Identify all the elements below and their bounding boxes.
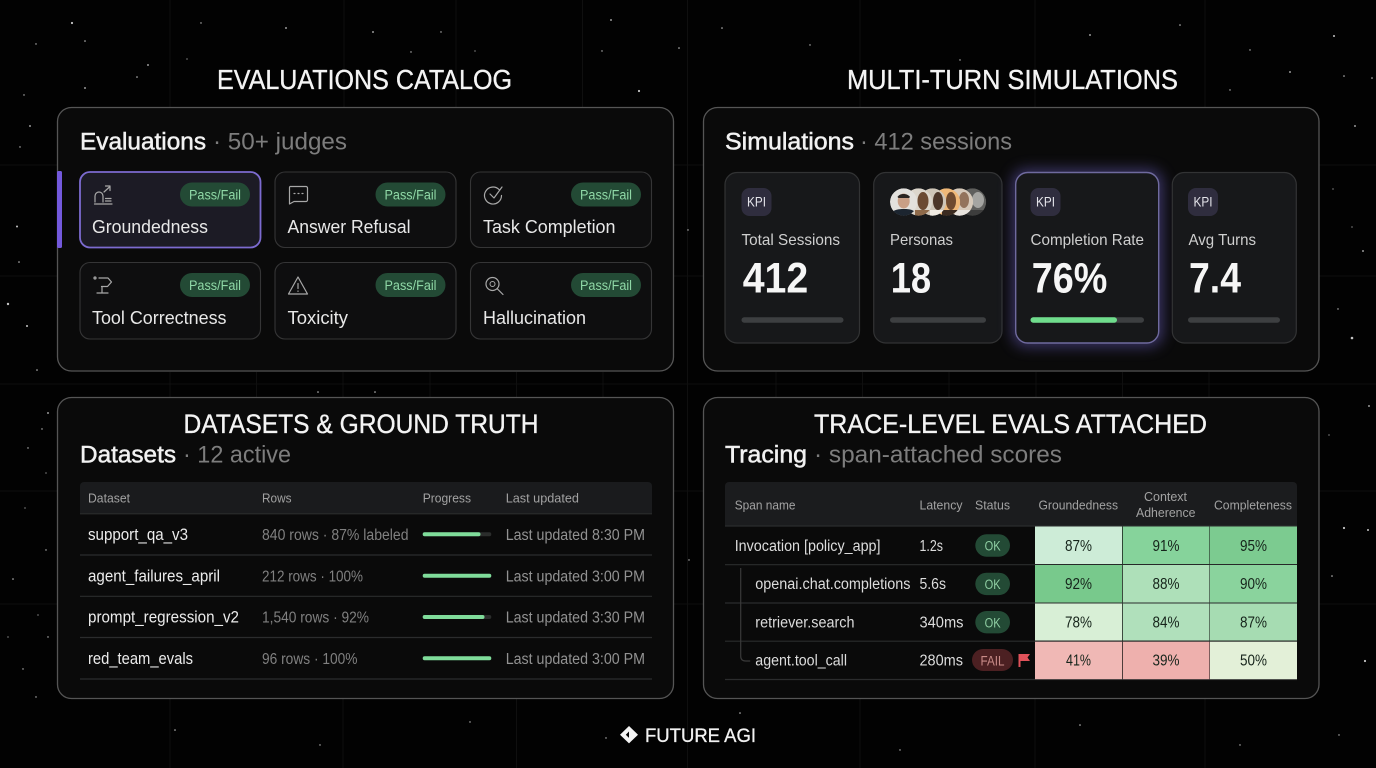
row: agent.tool_call (755, 649, 1030, 671)
row: red_team_evals: red_team_evals (88, 650, 193, 668)
table header: Adherence (1136, 505, 1196, 520)
row: agent.tool_call: FAIL (980, 653, 1005, 668)
kpi card: completion rate: Completion Rate (1030, 232, 1144, 249)
row: openai.chat.completions: 5.6s (920, 576, 946, 593)
heatmap: scores: 78% (1065, 614, 1092, 631)
row: invocation: 1.2s (920, 538, 943, 555)
row: agent.tool_call: agent.tool_call (755, 652, 847, 670)
row: red_team_evals (88, 650, 645, 668)
row: support_qa_v3: Last updated 8:30 PM (506, 527, 645, 544)
row: support_qa_v3: 840 rows · 87% labeled (262, 527, 408, 544)
card: toxicity: Toxicity (288, 308, 348, 328)
card: hallucination: Hallucination (483, 308, 586, 328)
panel heading: simulations: Simulations (725, 128, 854, 156)
logo: future agi: FUTURE AGI (645, 725, 756, 747)
card: answer refusal: Answer Refusal (288, 217, 410, 237)
row: openai.chat.completions: OK (985, 577, 1001, 592)
card: hallucination: Pass/Fail (580, 278, 632, 293)
kpi card: avg turns: 7.4 (1189, 254, 1241, 302)
kpi card: completion rate: 76% (1032, 254, 1107, 302)
heatmap: scores: 95% (1240, 538, 1267, 555)
panel heading: simulations: · 412 sessions (860, 128, 1012, 156)
row: invocation (735, 534, 1010, 557)
icon: robot arm (94, 277, 112, 293)
heatmap: scores: 87% (1240, 614, 1267, 631)
row: retriever.search: 340ms (920, 614, 964, 631)
heatmap: scores: 84% (1152, 614, 1180, 631)
row: support_qa_v3: support_qa_v3 (88, 526, 188, 544)
panel heading: datasets: Datasets (80, 442, 176, 468)
card: tool correctness: Tool Correctness (92, 308, 226, 328)
table header: Span name (735, 498, 796, 512)
heatmap: scores: 39% (1152, 652, 1180, 670)
heatmap: scores: 50% (1240, 652, 1267, 670)
card: toxicity: Pass/Fail (384, 278, 436, 293)
table header: Progress (423, 491, 471, 506)
table header (80, 482, 652, 514)
heatmap: scores: 87% (1065, 538, 1092, 555)
card: answer refusal (275, 172, 456, 248)
card: groundedness: Pass/Fail (189, 188, 241, 202)
kpi card: avg turns: KPI (1194, 194, 1212, 210)
icon: magnifier (486, 278, 503, 294)
kpi card: personas: 18 (891, 254, 931, 302)
heading: trace-level evals attached: TRACE-LEVEL EVALS ATTACHED (814, 409, 1207, 439)
kpi card: personas (874, 172, 1002, 343)
table: datasets (80, 482, 652, 679)
row: prompt_regression_v2: Last updated 3:30 PM (506, 610, 645, 626)
kpi card: avg turns (1172, 172, 1296, 343)
table header: Status (975, 498, 1010, 512)
title: evaluations catalog: EVALUATIONS CATALOG (217, 64, 512, 95)
card: task completion (470, 172, 652, 248)
kpi card: completion rate: KPI (1036, 194, 1055, 210)
card: tool correctness (80, 262, 260, 339)
panel heading: datasets: · 12 active (183, 442, 291, 468)
panel heading: tracing: · span-attached scores (814, 442, 1062, 468)
kpi card: total sessions: Total Sessions (742, 232, 840, 249)
selected indicator bar (57, 171, 62, 248)
card: task completion: Task Completion (483, 217, 616, 237)
kpi card: completion rate (1012, 169, 1163, 347)
heatmap: scores: 91% (1152, 538, 1180, 555)
card: tool correctness: Pass/Fail (189, 278, 241, 293)
icon: check circle (485, 187, 502, 204)
panel heading: simulations (725, 128, 1012, 156)
card: groundedness: Groundedness (92, 217, 208, 237)
heatmap: scores: 41% (1066, 652, 1091, 670)
panel: datasets (58, 398, 674, 698)
kpi card: total sessions (725, 172, 860, 343)
table header: Context (1144, 489, 1187, 504)
icon: warning triangle (288, 277, 308, 294)
row: support_qa_v3 (88, 526, 645, 544)
heatmap: scores: 88% (1152, 576, 1180, 593)
icon: groundedness (94, 186, 112, 204)
card: answer refusal: Pass/Fail (384, 188, 436, 202)
icon: logo diamond (620, 726, 638, 743)
row: red_team_evals: Last updated 3:00 PM (506, 651, 645, 668)
row: agent.tool_call: 280ms (920, 652, 963, 670)
kpi card: total sessions: KPI (747, 194, 766, 210)
panel: evaluations (57, 108, 674, 371)
panel heading: evaluations: · 50+ judges (213, 128, 347, 156)
row: retriever.search (755, 611, 1010, 633)
heading: datasets and ground truth: DATASETS & GROUND TRUTH (184, 409, 538, 439)
panel heading: tracing: Tracing (725, 442, 807, 468)
icon: speech bubble (289, 186, 308, 204)
row: prompt_regression_v2: prompt_regression_v2 (88, 608, 239, 626)
row: openai.chat.completions (755, 573, 1010, 595)
card: hallucination (470, 262, 652, 339)
table header: Last updated (506, 491, 579, 506)
table header: Rows (262, 491, 292, 506)
row: retriever.search: retriever.search (755, 614, 854, 631)
card: toxicity (275, 262, 456, 339)
panel heading: evaluations: Evaluations (80, 128, 206, 156)
row: agent_failures_april (88, 567, 645, 585)
heatmap: scores: 92% (1065, 576, 1092, 593)
row: agent_failures_april: Last updated 3:00 PM (506, 568, 645, 585)
row: openai.chat.completions: openai.chat.completions (755, 576, 911, 593)
table header (725, 482, 1297, 526)
table header: Groundedness (1038, 498, 1118, 512)
title: multi-turn simulations: MULTI-TURN SIMULATIONS (847, 64, 1178, 95)
card: task completion: Pass/Fail (580, 188, 632, 202)
row: prompt_regression_v2: 1,540 rows · 92% (262, 610, 369, 626)
panel heading: evaluations (80, 128, 347, 156)
row: prompt_regression_v2 (88, 608, 645, 626)
table header: Latency (920, 498, 963, 512)
panel: simulations (704, 108, 1319, 371)
icon: red flag (1018, 654, 1030, 667)
row: agent_failures_april: 212 rows · 100% (262, 568, 363, 585)
row: agent_failures_april: agent_failures_april (88, 567, 220, 585)
heatmap: scores: 90% (1240, 576, 1267, 593)
table: trace spans (725, 482, 1297, 680)
table header: Completeness (1214, 498, 1292, 512)
kpi card: total sessions: 412 (743, 254, 808, 302)
table header: Dataset (88, 491, 130, 506)
card: groundedness (80, 172, 260, 248)
row: invocation: Invocation [policy_app] (735, 538, 880, 555)
persona avatars (890, 188, 986, 218)
row: red_team_evals: 96 rows · 100% (262, 651, 358, 668)
row: retriever.search: OK (985, 615, 1001, 630)
kpi card: avg turns: Avg Turns (1188, 232, 1256, 249)
heatmap: scores (1035, 526, 1297, 679)
kpi card: personas: Personas (890, 232, 953, 249)
panel: tracing (704, 398, 1319, 698)
tree connector (741, 568, 750, 661)
row: invocation: OK (985, 538, 1001, 554)
panel heading: datasets (80, 442, 291, 468)
